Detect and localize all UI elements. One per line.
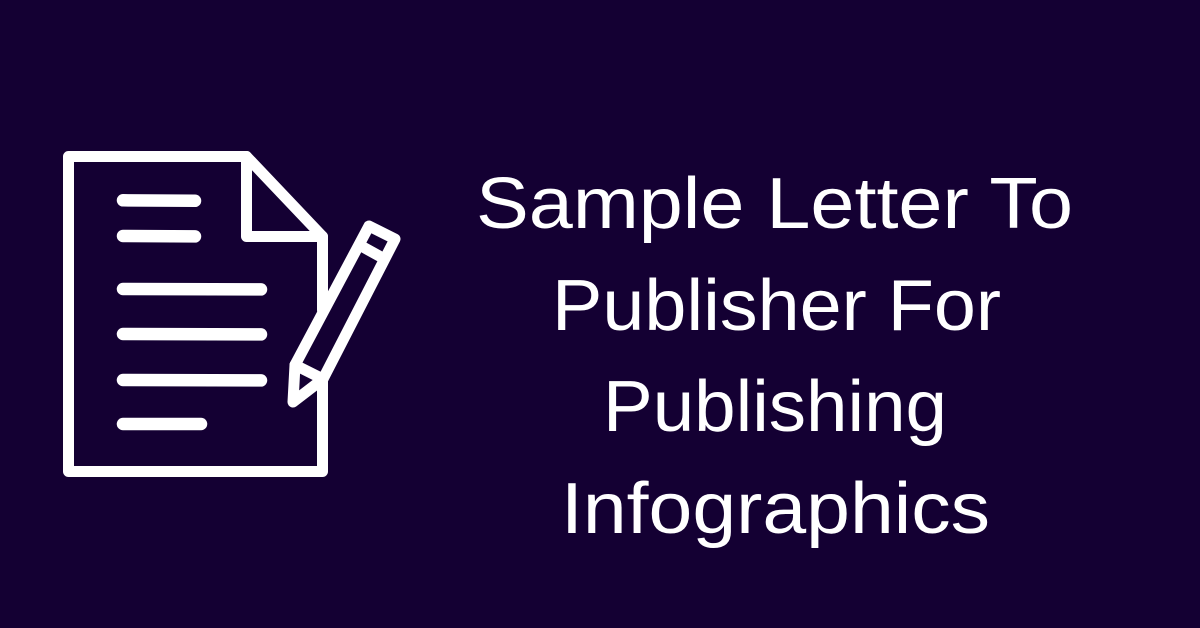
icon: document text lines <box>123 200 261 424</box>
title <box>476 164 1073 549</box>
icon: document with pencil <box>68 156 395 472</box>
title: Sample Letter To <box>476 164 1073 244</box>
icon: document page outline <box>68 156 322 472</box>
title: Infographics <box>561 469 990 549</box>
title: Publishing <box>603 367 947 447</box>
title: Publisher For <box>552 266 1001 346</box>
icon: pencil <box>293 226 395 402</box>
icon: folded corner <box>246 156 322 236</box>
